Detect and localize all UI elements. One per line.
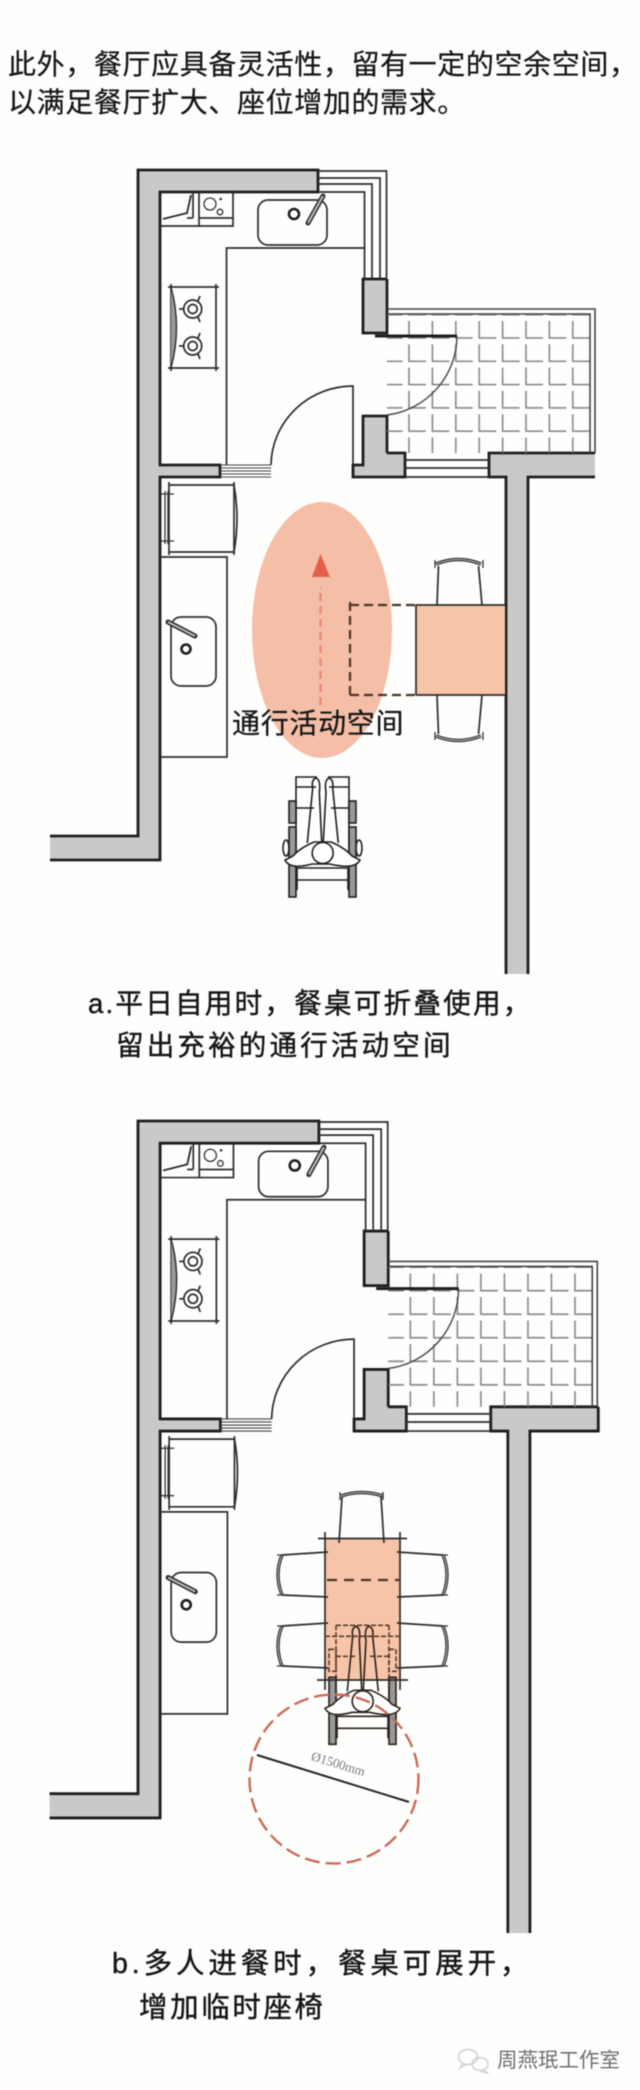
top right window [318,171,386,279]
folded dining table [350,602,505,698]
balcony window [406,1414,491,1431]
refrigerator [161,482,237,555]
water heater and washer cabinet [160,1143,233,1178]
activity space label: 通行活动空间 [232,708,404,739]
kitchen sink [258,196,327,245]
watermark: 周燕珉工作室 [497,2049,620,2072]
top right window [319,1122,388,1231]
folded frame under table [325,1625,400,1680]
kitchen door [220,1339,354,1431]
turning circle [250,1694,418,1864]
intro text: 此外，餐厅应具备灵活性，留有一定的空余空间， [8,49,638,80]
kitchen sink [259,1147,328,1197]
caption b [112,1948,532,2024]
wheelchair b [325,1625,400,1744]
caption b: 增加临时座椅 [139,1992,326,2024]
table end line [317,1679,408,1681]
activity zone ellipse [252,502,392,758]
lower counter [160,557,227,757]
balcony with tiled floor [388,1261,597,1407]
turning circle: Ø1500mm [310,1748,367,1779]
chair top [435,560,483,605]
extended dining table [318,1532,407,1690]
caption a: 留出充裕的通行活动空间 [116,1030,454,1061]
intro text: 以满足餐厅扩大、座位增加的需求。 [8,87,466,118]
gas stove [168,284,219,371]
icon: wechat [458,2050,488,2073]
floor plan b [50,1121,598,1933]
kitchen counter outline [226,248,364,465]
balcony door [375,336,457,415]
intro text [8,49,638,118]
lower sink [168,617,216,686]
chair right lower [397,1623,448,1668]
caption a [88,988,533,1061]
walls [50,170,595,974]
balcony with tiled floor [387,309,595,453]
caption a: a.平日自用时，餐桌可折叠使用， [88,988,533,1019]
refrigerator [161,1436,237,1510]
wheelchair a [283,777,362,897]
floor plan a [50,170,595,974]
water heater and washer cabinet [160,192,233,226]
chair left upper [277,1552,328,1597]
chair left lower [277,1623,328,1668]
lower sink [168,1572,216,1642]
lower counter [160,1512,227,1714]
caption b: b.多人进餐时，餐桌可展开， [112,1948,532,1980]
chair bottom [435,695,483,740]
chair top [339,1492,384,1543]
walls [50,1121,598,1933]
gas stove [168,1236,219,1324]
kitchen counter outline [227,1200,365,1419]
balcony door [376,1289,459,1368]
balcony window [405,460,489,477]
kitchen door [220,386,353,477]
chair right upper [397,1552,448,1597]
arrow [312,554,330,705]
